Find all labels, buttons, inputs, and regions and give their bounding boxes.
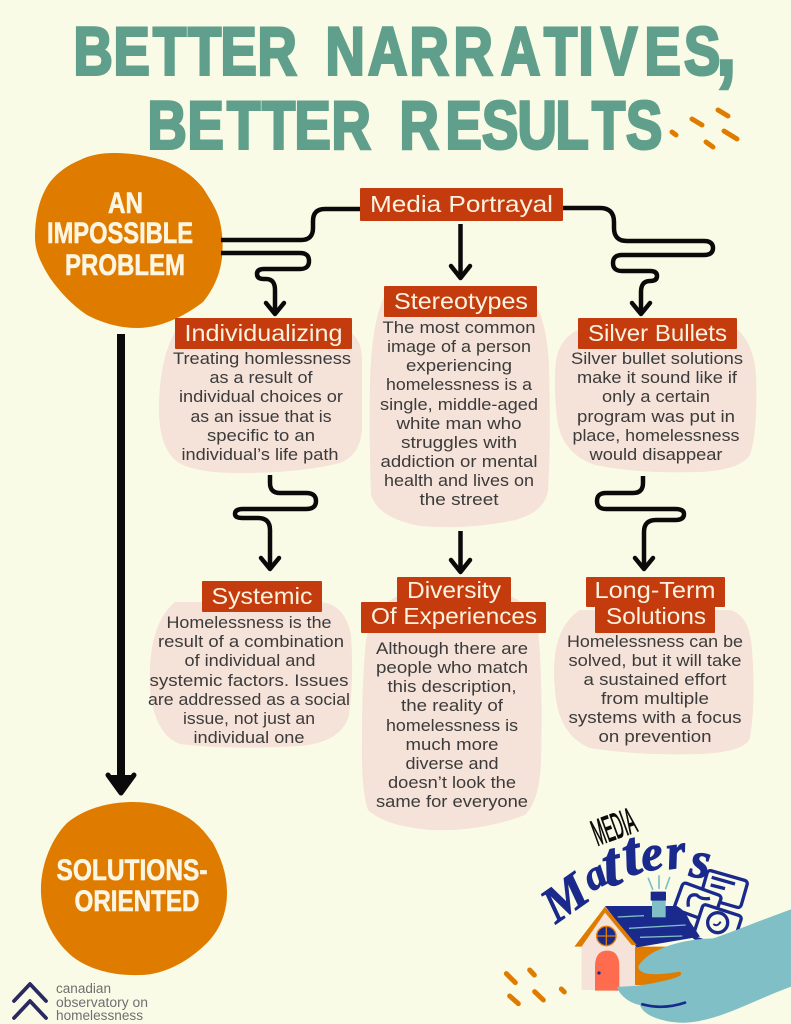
panel: solutions-oriented (41, 802, 227, 975)
panel: stereotypes (370, 286, 550, 527)
text: long-term description: systems with a focus (568, 708, 742, 727)
text: stereotypes description: experiencing (406, 356, 512, 375)
text: systemic description: Homelessness is the (166, 613, 332, 632)
label: stereotypes (384, 286, 537, 317)
text: long-term description (567, 632, 743, 746)
panel: diversity of experiences (361, 577, 546, 830)
arrow: media portrayal to stereotypes (451, 224, 470, 278)
title: RESULTS (400, 88, 662, 164)
text: systemic description: individual one (194, 728, 304, 747)
text: silver bullets description: only a certain (602, 387, 710, 406)
label: media portrayal: Media Portrayal (370, 191, 553, 217)
text: diversity description: doesn’t look the (388, 773, 516, 792)
text: stereotypes description: white man who (395, 414, 522, 433)
text: long-term description: a sustained effort (584, 670, 727, 689)
label: media portrayal (360, 188, 563, 221)
text: stereotypes description: health and lives on (384, 471, 534, 490)
panel: systemic (148, 581, 352, 748)
text: silver bullets description: program was put in (577, 407, 735, 426)
title (74, 0, 736, 164)
label: long-term solutions (586, 577, 725, 633)
arrow: silver bullets to long-term (597, 476, 684, 569)
text: long-term description: solved, but it will take (568, 651, 742, 670)
text: individualizing description: individual’s life path (182, 445, 338, 464)
text: stereotypes description (380, 318, 538, 509)
arrow: individualizing to systemic (235, 475, 316, 569)
label: systemic: Systemic (212, 583, 312, 609)
label: long-term solutions: Long-Term (594, 577, 716, 603)
arrow: left connector from media portrayal to blob (221, 209, 360, 240)
text: individualizing description: Treating homlessness (173, 349, 351, 368)
logo: canadian observatory on homelessness: canadian (56, 981, 111, 996)
text: diversity description (376, 639, 528, 811)
icon: media matters house and hand: MEDIA (586, 800, 642, 854)
text: stereotypes description: image of a person (387, 337, 531, 356)
logo: canadian observatory on homelessness: homelessness (56, 1008, 143, 1023)
text: diversity description: people who match (376, 658, 528, 677)
icon: hand (617, 909, 791, 1023)
text: individualizing description: specific to an (207, 426, 315, 445)
text: systemic description: are addressed as a social (148, 690, 350, 709)
icon: orange dashes near title (672, 110, 737, 147)
text: diversity description: Although there are (376, 639, 528, 658)
logo: canadian observatory on homelessness: observatory on (56, 995, 148, 1010)
icon: house (574, 892, 700, 991)
text: matters: s (686, 831, 715, 891)
arrow: blob to individualizing (221, 253, 309, 314)
text: matters: t (595, 828, 629, 900)
text: diversity description: much more (406, 735, 498, 754)
text: matters: e (636, 823, 667, 882)
text: individualizing description: as a result of (210, 368, 313, 387)
panel: long-term solutions (554, 577, 754, 754)
panel: silver bullets (555, 318, 756, 472)
text: systemic description: of individual and (184, 651, 316, 670)
text: individualizing description: as an issue that is (190, 407, 332, 426)
text: stereotypes description: The most common (382, 318, 536, 337)
title: BETTER (148, 88, 371, 164)
icon: media cards (674, 870, 748, 950)
arrow: problem to solutions (108, 334, 134, 793)
text: silver bullets description (571, 349, 743, 464)
text: silver bullets description: make it sound like if (577, 368, 737, 387)
text: silver bullets description: place, homelessness (572, 426, 740, 445)
panel: an impossible problem: PROBLEM (65, 249, 185, 282)
text: stereotypes description: struggles with (401, 433, 517, 452)
logo: canadian observatory on homelessness (14, 981, 148, 1023)
text: systemic description: issue, not just an (183, 709, 315, 728)
panel: an impossible problem (35, 153, 223, 328)
text: diversity description: same for everyone (376, 792, 528, 811)
label: stereotypes: Stereotypes (394, 288, 528, 314)
label: diversity of experiences: Diversity (407, 577, 502, 603)
icon: rays (648, 876, 670, 889)
text: matters: M (529, 861, 600, 934)
text: individualizing description (173, 349, 351, 464)
text: diversity description: diverse and (406, 754, 498, 773)
text: long-term description: from multiple (601, 689, 709, 708)
icon: orange dashes (506, 970, 564, 1004)
text: long-term description: Homelessness can be (567, 632, 743, 651)
label: diversity of experiences: Of Experiences (371, 603, 537, 629)
title: BETTER (74, 14, 297, 90)
text: systemic description (148, 613, 350, 747)
text: individualizing description: individual choices or (179, 387, 343, 406)
panel: individualizing (159, 318, 362, 473)
text: diversity description: the reality of (401, 696, 503, 715)
panel: an impossible problem: AN (108, 187, 143, 220)
icon: media matters house and hand (506, 800, 791, 1023)
label: individualizing: Individualizing (184, 320, 342, 346)
text: diversity description: homelessness is (386, 716, 518, 735)
text: systemic description: systemic factors. Issues (150, 671, 348, 690)
label: long-term solutions: Solutions (606, 603, 706, 629)
panel: an impossible problem: IMPOSSIBLE (47, 217, 193, 250)
panel: solutions-oriented: ORIENTED (74, 885, 200, 918)
text: silver bullets description: would disappear (588, 445, 723, 464)
text: matters (529, 817, 715, 934)
label: silver bullets: Silver Bullets (588, 320, 727, 346)
arrow: stereotypes to diversity (451, 531, 470, 572)
label: systemic (202, 581, 322, 612)
text: stereotypes description: the street (420, 490, 499, 509)
text: stereotypes description: single, middle-aged (380, 395, 538, 414)
label: individualizing (175, 318, 352, 349)
text: systemic description: result of a combination (158, 632, 344, 651)
text: matters: t (615, 817, 649, 890)
text: diversity description: this description, (388, 677, 516, 696)
text: matters: a (575, 850, 615, 900)
arrow: media portrayal to silver bullets (563, 208, 713, 314)
text: long-term description: on prevention (598, 727, 712, 746)
text: silver bullets description: Silver bullet solutions (571, 349, 743, 368)
text: stereotypes description: homelessness is a (386, 375, 533, 394)
text: stereotypes description: addiction or mental (380, 452, 538, 471)
text: matters: r (662, 822, 690, 880)
label: diversity of experiences (361, 577, 546, 633)
panel: solutions-oriented: SOLUTIONS- (56, 854, 208, 887)
